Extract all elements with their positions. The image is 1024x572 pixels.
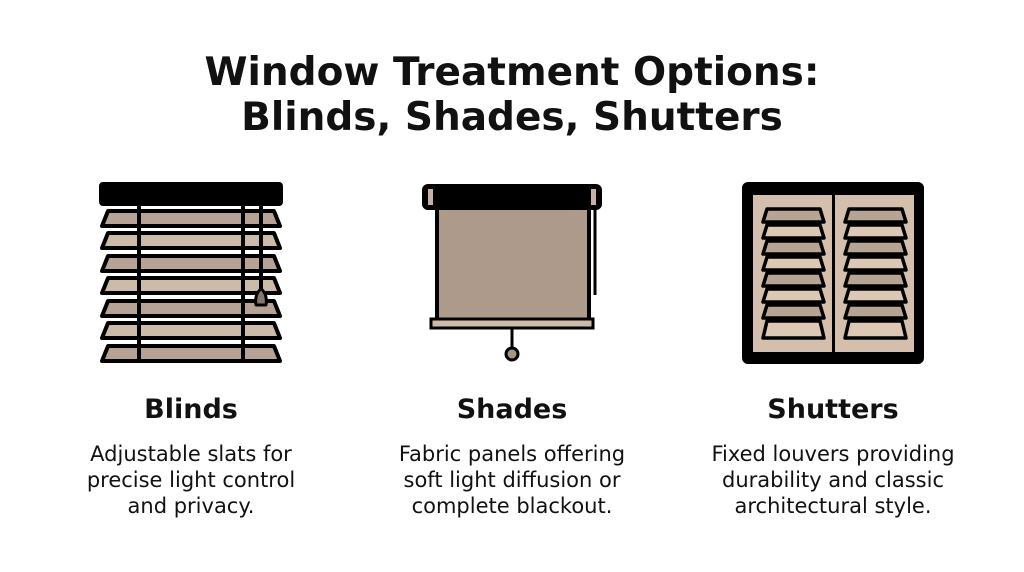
- icon: shutters: [744, 184, 922, 362]
- text: blinds: Adjustable slats for: [90, 442, 292, 466]
- text: shutters: durability and classic: [722, 468, 944, 492]
- icon: shades: [424, 186, 600, 360]
- text: shutters: [711, 442, 955, 518]
- heading: blinds: Blinds: [144, 394, 238, 425]
- title: Blinds, Shades, Shutters: [241, 95, 783, 140]
- text: blinds: precise light control: [87, 468, 295, 492]
- heading: shades: Shades: [457, 394, 567, 425]
- text: shades: soft light diffusion or: [404, 468, 620, 492]
- text: blinds: and privacy.: [128, 494, 254, 518]
- text: shades: complete blackout.: [412, 494, 612, 518]
- title: Window Treatment Options:: [205, 50, 819, 95]
- text: shades: [399, 442, 625, 518]
- icon: blinds: [101, 184, 281, 362]
- heading: shutters: Shutters: [767, 394, 899, 425]
- title: [205, 50, 819, 140]
- text: shades: Fabric panels offering: [399, 442, 625, 466]
- text: shutters: architectural style.: [734, 494, 932, 518]
- text: shutters: Fixed louvers providing: [711, 442, 955, 466]
- text: blinds: [87, 442, 295, 518]
